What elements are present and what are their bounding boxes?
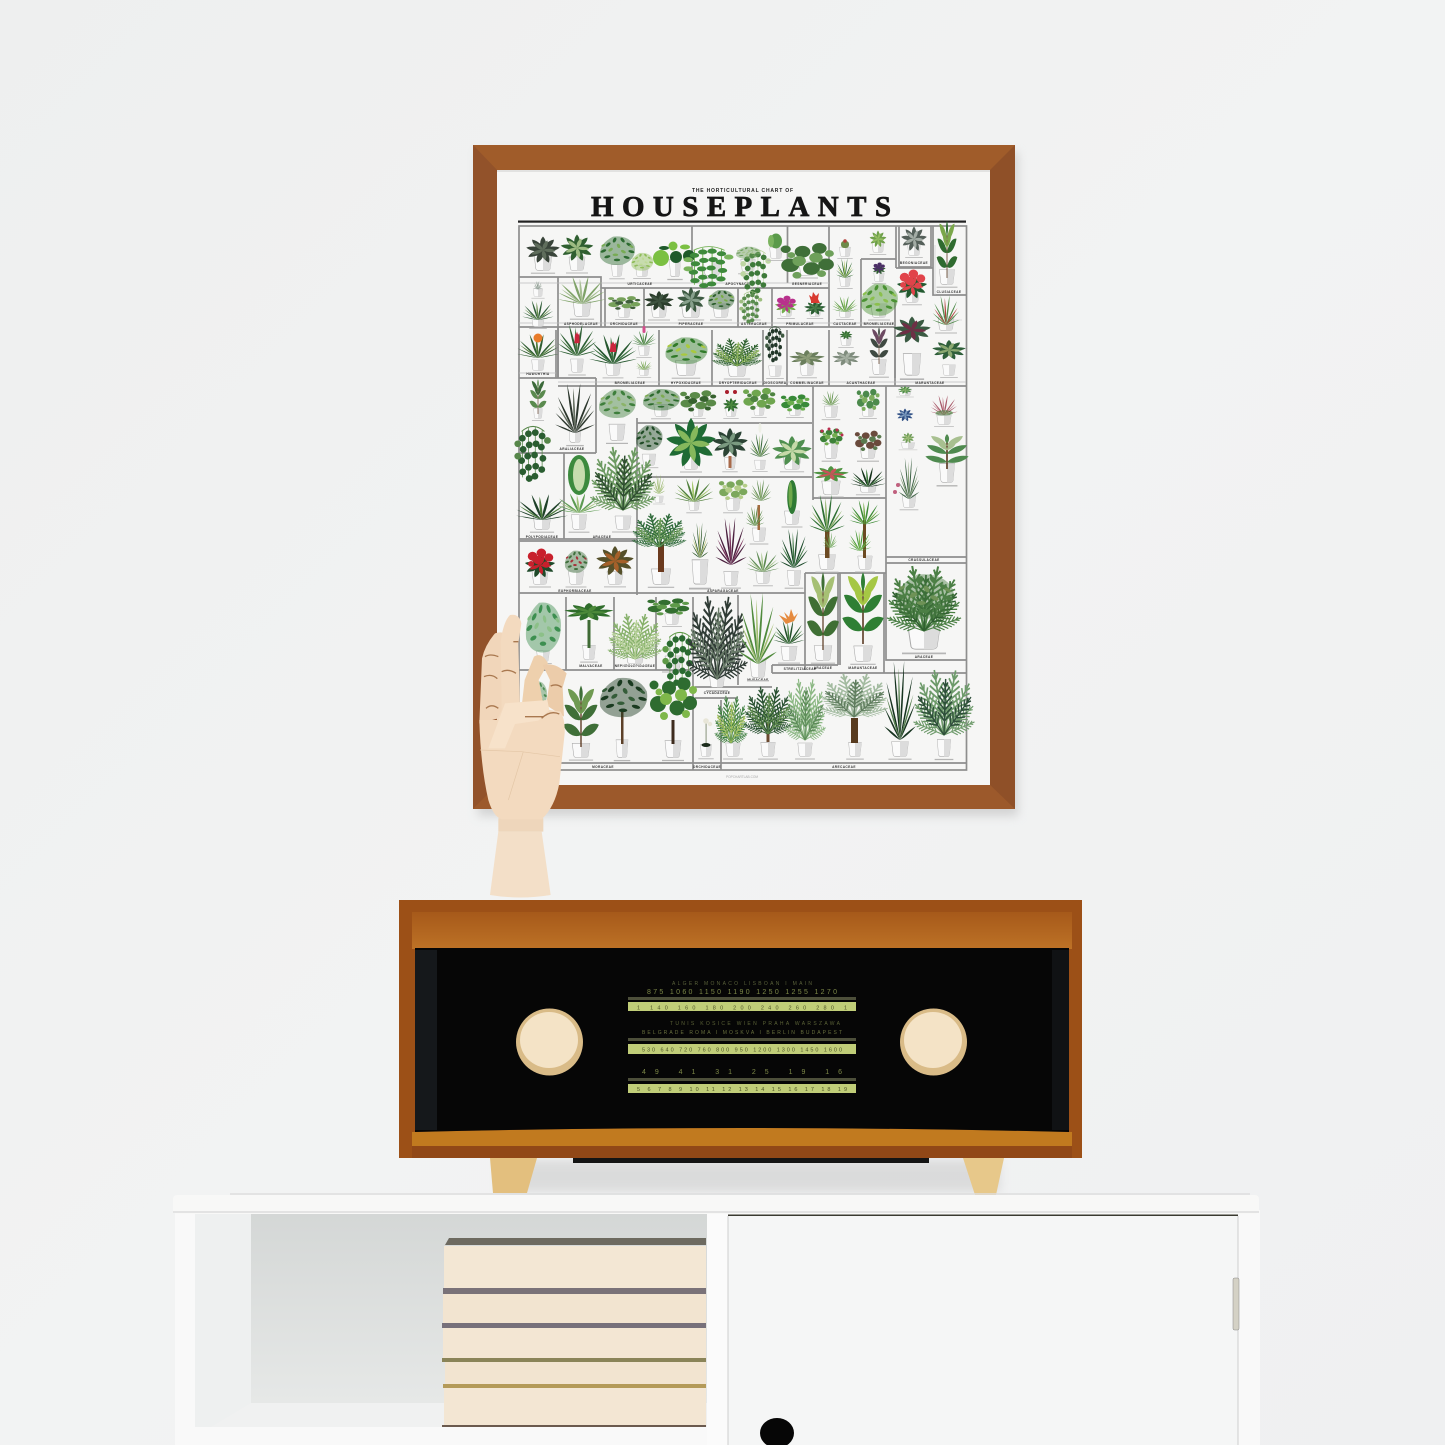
plant: dieffenbachia pale: [772, 436, 812, 472]
plant: yucca: [809, 494, 845, 573]
plant: begonia: [526, 236, 560, 274]
plant: grey nerve: [832, 350, 860, 366]
plant: small cactus: [837, 239, 853, 259]
radio legs: [490, 1158, 1004, 1195]
plant: dark schefflera: [555, 383, 595, 446]
radio bottom band: [412, 1128, 1072, 1147]
plant: peperomia glossy: [708, 290, 734, 320]
plant: rhapis palm: [884, 660, 916, 760]
book top cover: [445, 1238, 706, 1245]
plant: round succulent: [899, 432, 917, 450]
plant family labels: BEGONIACEAE: [900, 261, 928, 265]
plant: peperomia dark: [644, 291, 674, 320]
plant family labels: ARECACEAE: [832, 765, 856, 769]
plant family labels: ORCHIDACEAE: [693, 765, 721, 769]
plant: tall clusia: [936, 221, 958, 288]
plant: poinsettia: [524, 549, 556, 588]
plant family labels: ACANTHACEAE: [846, 381, 876, 385]
plant: fishtail palm: [783, 677, 827, 760]
plant: pothos: [665, 337, 708, 379]
plant family labels: CACTACEAE: [833, 322, 857, 326]
plant: peace lily: [749, 423, 771, 472]
plant: rex begonia: [901, 226, 927, 258]
plant: rubber tree: [562, 685, 600, 761]
plant family labels: HAWORTHIA: [526, 372, 550, 376]
plant: bunny cactus: [767, 234, 785, 261]
plant: string of hearts: [662, 632, 697, 686]
title: houseplants: HOUSEPLANTS: [591, 191, 891, 223]
plant family labels: MALVACEAE: [579, 664, 603, 668]
plant: aralia small: [529, 379, 547, 421]
plant family labels: BROMELIACEAE: [864, 322, 894, 326]
plant: baby tears: [631, 253, 653, 279]
plant: pothos golden: [643, 389, 680, 419]
plant: spider aloe: [558, 276, 606, 320]
plant: watermelon peperomia: [677, 287, 705, 320]
plant: pilea bromeliad green: [861, 284, 898, 320]
plant: ficus tree: [600, 678, 647, 761]
plant family labels: BROMELIACEAE: [615, 381, 645, 385]
plant: croton: [596, 546, 634, 587]
book four: [445, 1362, 706, 1384]
plant: pink bromeliad: [557, 324, 597, 376]
radio dial two: [628, 1021, 856, 1054]
plant family labels: URTICACEAE: [628, 282, 652, 286]
cabinet top: [173, 1195, 1259, 1214]
plant family labels: EUPHORBIACEAE: [558, 589, 592, 593]
plant: dark vine: [765, 327, 784, 379]
radio dial one: ALGER MONACO LISBOAN I MAIN: [672, 981, 812, 987]
plant: fiddle leaf: [841, 572, 885, 665]
plant: areca palm: [588, 445, 658, 532]
plant family labels: ARACEAE: [593, 535, 611, 539]
plant: fiddle leaf fig: [650, 678, 697, 761]
plant: echeveria: [822, 391, 840, 420]
chart title: [591, 188, 891, 223]
plant: blue echeveria: [896, 408, 914, 421]
plant: ponytail palm: [629, 513, 688, 588]
plant: haworthia small: [531, 281, 545, 298]
plant: parlor dracaena: [780, 528, 808, 589]
plant: cast iron plant: [516, 494, 568, 533]
plant family labels: ASPHODELACEAE: [564, 322, 598, 326]
plant: philodendron: [599, 389, 636, 444]
plant family labels: ASPARAGACEAE: [707, 589, 739, 593]
plant: tillandsia pink: [631, 326, 657, 358]
plants: row one: [526, 221, 958, 295]
cabinet divider: [707, 1214, 728, 1445]
plants: row three: [517, 316, 966, 380]
plant: nerve green: [838, 330, 854, 348]
radio dial two: TUNIS KOSICE WIEN PRAHA WARSZAWA: [670, 1021, 841, 1027]
plant: boston fern: [605, 613, 664, 666]
book five: [444, 1388, 706, 1425]
plant: parlor fern: [526, 602, 561, 664]
radio left leg: [490, 1158, 537, 1193]
plant family labels: MARANTACEAE: [848, 666, 878, 670]
cabinet open compartment: [195, 1214, 707, 1427]
plant: purple ti plant: [715, 517, 747, 589]
plants: lower rows: [526, 564, 977, 761]
cabinet door: [728, 1214, 1238, 1445]
plant: trailing pot: [736, 247, 761, 259]
plant: alocasia: [806, 572, 840, 664]
hand: ring finger: [522, 655, 548, 707]
hand: thumb: [488, 700, 549, 748]
plant: philodendron brasil: [680, 390, 716, 419]
plant family labels: POLYPODIACEAE: [526, 535, 558, 539]
plants: row four middle: [636, 418, 970, 544]
plant: green cactus: [869, 230, 887, 255]
plants: euphorbia row: [524, 546, 634, 588]
plant: fittonia: [560, 234, 594, 274]
plant: air plant: [636, 360, 652, 378]
plant family labels: MORACEAE: [592, 765, 614, 769]
radio dial one: 875 1060 1150 1190 1250 1255 1270: [647, 989, 837, 996]
cabinet body: [175, 1210, 1260, 1445]
radio right knob: [900, 1008, 967, 1076]
plant: air plant small: [653, 474, 665, 504]
plant: african violet: [872, 263, 886, 284]
plant: small orchid leaf: [608, 296, 640, 320]
plant family labels: ORCHIDACEAE: [610, 322, 638, 326]
white cabinet: [173, 1194, 1260, 1445]
plant: spider plant: [674, 478, 714, 513]
plant: bird of paradise flower: [773, 609, 805, 664]
plant family labels: DIOSCOREA: [764, 381, 787, 385]
plant family labels: COMMELINACEAE: [790, 381, 824, 385]
plant: red azalea: [896, 270, 928, 305]
plant family labels: ARACEAE: [915, 655, 933, 659]
plant: orange lily: [517, 334, 559, 373]
plant: dracula orchid: [893, 457, 920, 510]
book one: [444, 1246, 706, 1288]
plant: monstera: [666, 418, 716, 472]
plant: pink flowering succulent: [930, 395, 958, 427]
plant: peperomia: [781, 243, 834, 279]
plant: rattlesnake calathea: [712, 428, 748, 472]
header rule: [518, 220, 966, 223]
hand: middle finger: [501, 615, 521, 710]
plant: majesty palm: [817, 673, 890, 760]
hand: palm: [479, 703, 565, 819]
plant: red prayer plant: [893, 316, 931, 380]
plant family labels: GESNERIACEAE: [792, 282, 822, 286]
plant family labels: HYPOXIDACEAE: [671, 381, 701, 385]
hand: forearm: [490, 832, 551, 897]
plant family labels: ARACEAE: [814, 666, 832, 670]
plant: pale aralia: [719, 480, 747, 513]
plant: jade: [857, 389, 880, 419]
plant: chamaedorea: [713, 694, 749, 760]
plant family labels: CRASSULACEAE: [908, 558, 940, 562]
plant: brown echeveria: [855, 431, 881, 462]
radio dial two: 530 640 720 760 800 950 1200 1300 1450 1600: [642, 1048, 842, 1054]
plant: syngonium: [743, 388, 775, 418]
plant: devil's ivy: [514, 426, 551, 482]
plant: dracaena tree: [848, 500, 881, 572]
plant family labels: APOCYNACEAE: [725, 282, 755, 286]
radio dial two: BELGRADE ROMA I MOSKVA I BERLIN BUDAPEST: [642, 1030, 842, 1036]
plant: hidden palm behind hand: [529, 681, 547, 708]
radio dial one: 1 140 160 180 200 240 260 280 1: [637, 1006, 847, 1012]
plant: rubber fig: [924, 434, 970, 486]
plant: kentia palm: [911, 668, 977, 760]
book two: [443, 1294, 706, 1323]
frame shadow: [478, 152, 1018, 816]
plant: snake aloe: [836, 258, 854, 289]
stack of books: [442, 1238, 706, 1427]
plant family labels: NEPHROLEPIDACEAE: [615, 664, 655, 668]
radio black glass panel: [415, 948, 1069, 1132]
plant family labels: CYCADACEAE: [704, 691, 730, 695]
plant: spider fountain: [746, 550, 780, 586]
plant: sago palm: [684, 594, 750, 692]
plant family labels: CLUSIACEAE: [937, 290, 961, 294]
plant: aloe vera: [522, 300, 554, 329]
plant: lady palm: [742, 685, 794, 760]
plant: zygo cactus: [832, 296, 858, 320]
title: small heading: THE HORTICULTURAL CHART OF: [692, 188, 793, 194]
hand: wrist: [498, 818, 543, 832]
wooden picture frame: [473, 145, 1015, 809]
plant: cypress column: [782, 480, 802, 528]
radio dial three: [628, 1069, 856, 1093]
plant: zz plant: [884, 564, 964, 654]
plant: orchid: [698, 718, 714, 759]
radio shadow on shelf: [500, 1160, 1000, 1192]
plant: dark calathea: [869, 327, 889, 378]
plant family labels: DRYOPTERIDACEAE: [719, 381, 757, 385]
plant: string of turtles: [600, 236, 635, 279]
plant: crown of thorns: [565, 551, 588, 588]
plant family labels: [526, 261, 961, 769]
plants: row two: [522, 270, 960, 334]
plant: zz dark: [636, 425, 662, 468]
plant: chinese money plant: [653, 242, 695, 280]
plant family labels: MARANTACEAE: [915, 381, 945, 385]
door hinge: [1233, 1278, 1239, 1330]
plant: aloe dark: [850, 467, 886, 495]
plant: hoya vine: [684, 247, 733, 288]
plant: money tree: [564, 603, 614, 663]
plant: snake plant: [689, 522, 711, 590]
radio dial one: [628, 981, 856, 1012]
plant: dieffenbachia tall: [556, 455, 602, 533]
wooden radio: [399, 900, 1082, 1158]
plants: palms and dracaenas: [516, 445, 881, 590]
plant: red bromeliad: [932, 295, 960, 334]
radio right leg: [963, 1158, 1004, 1195]
radio top inner band: [412, 912, 1072, 949]
plants: row four left: [514, 379, 958, 482]
plant: heartleaf: [781, 394, 809, 418]
plant family labels: STRELITZIACEAE: [784, 667, 816, 671]
hand: little finger: [543, 664, 567, 717]
radio left knob: [516, 1008, 583, 1076]
wooden artist hand: [479, 615, 567, 897]
radio cabinet: [399, 900, 1082, 1158]
plant family labels: ARALIACEAE: [560, 447, 584, 451]
plant: vine arch: [739, 292, 762, 323]
plant: maranta: [932, 340, 966, 378]
radio dial three: 5 6 7 8 9 10 11 12 13 14 15 16 17 18 19: [637, 1087, 847, 1093]
book three: [443, 1328, 706, 1358]
plant: variegated string of hearts: [738, 250, 771, 295]
plant: geranium: [820, 428, 844, 462]
footer credit: POPCHARTLAB.COM: [726, 775, 758, 779]
plant family labels: PRIMULACEAE: [786, 322, 814, 326]
radio dial three: 49 41 31 25 19 16: [642, 1069, 842, 1076]
plant: dracaena marginata: [746, 479, 772, 544]
plant family labels: MUSACEAE: [747, 678, 769, 682]
hand: index finger: [479, 632, 510, 723]
plant: cyclamen: [804, 292, 826, 319]
plant: anthurium: [723, 390, 739, 419]
plant: tradescantia: [789, 350, 825, 378]
plant: fern: [710, 338, 764, 380]
door hole: [760, 1418, 794, 1445]
plant family labels: ASTERACEAE: [741, 322, 767, 326]
plant: guzmania red: [589, 334, 637, 378]
plant: red aglaonema: [813, 466, 849, 498]
plant family labels: PIPERACEAE: [679, 322, 703, 326]
plant: pilea on stand: [647, 598, 689, 627]
plant: pink cineraria: [775, 296, 797, 319]
chart panel grid: [519, 226, 966, 770]
plant: kalanchoe: [896, 386, 914, 397]
plant: bird of paradise tall: [739, 592, 777, 681]
